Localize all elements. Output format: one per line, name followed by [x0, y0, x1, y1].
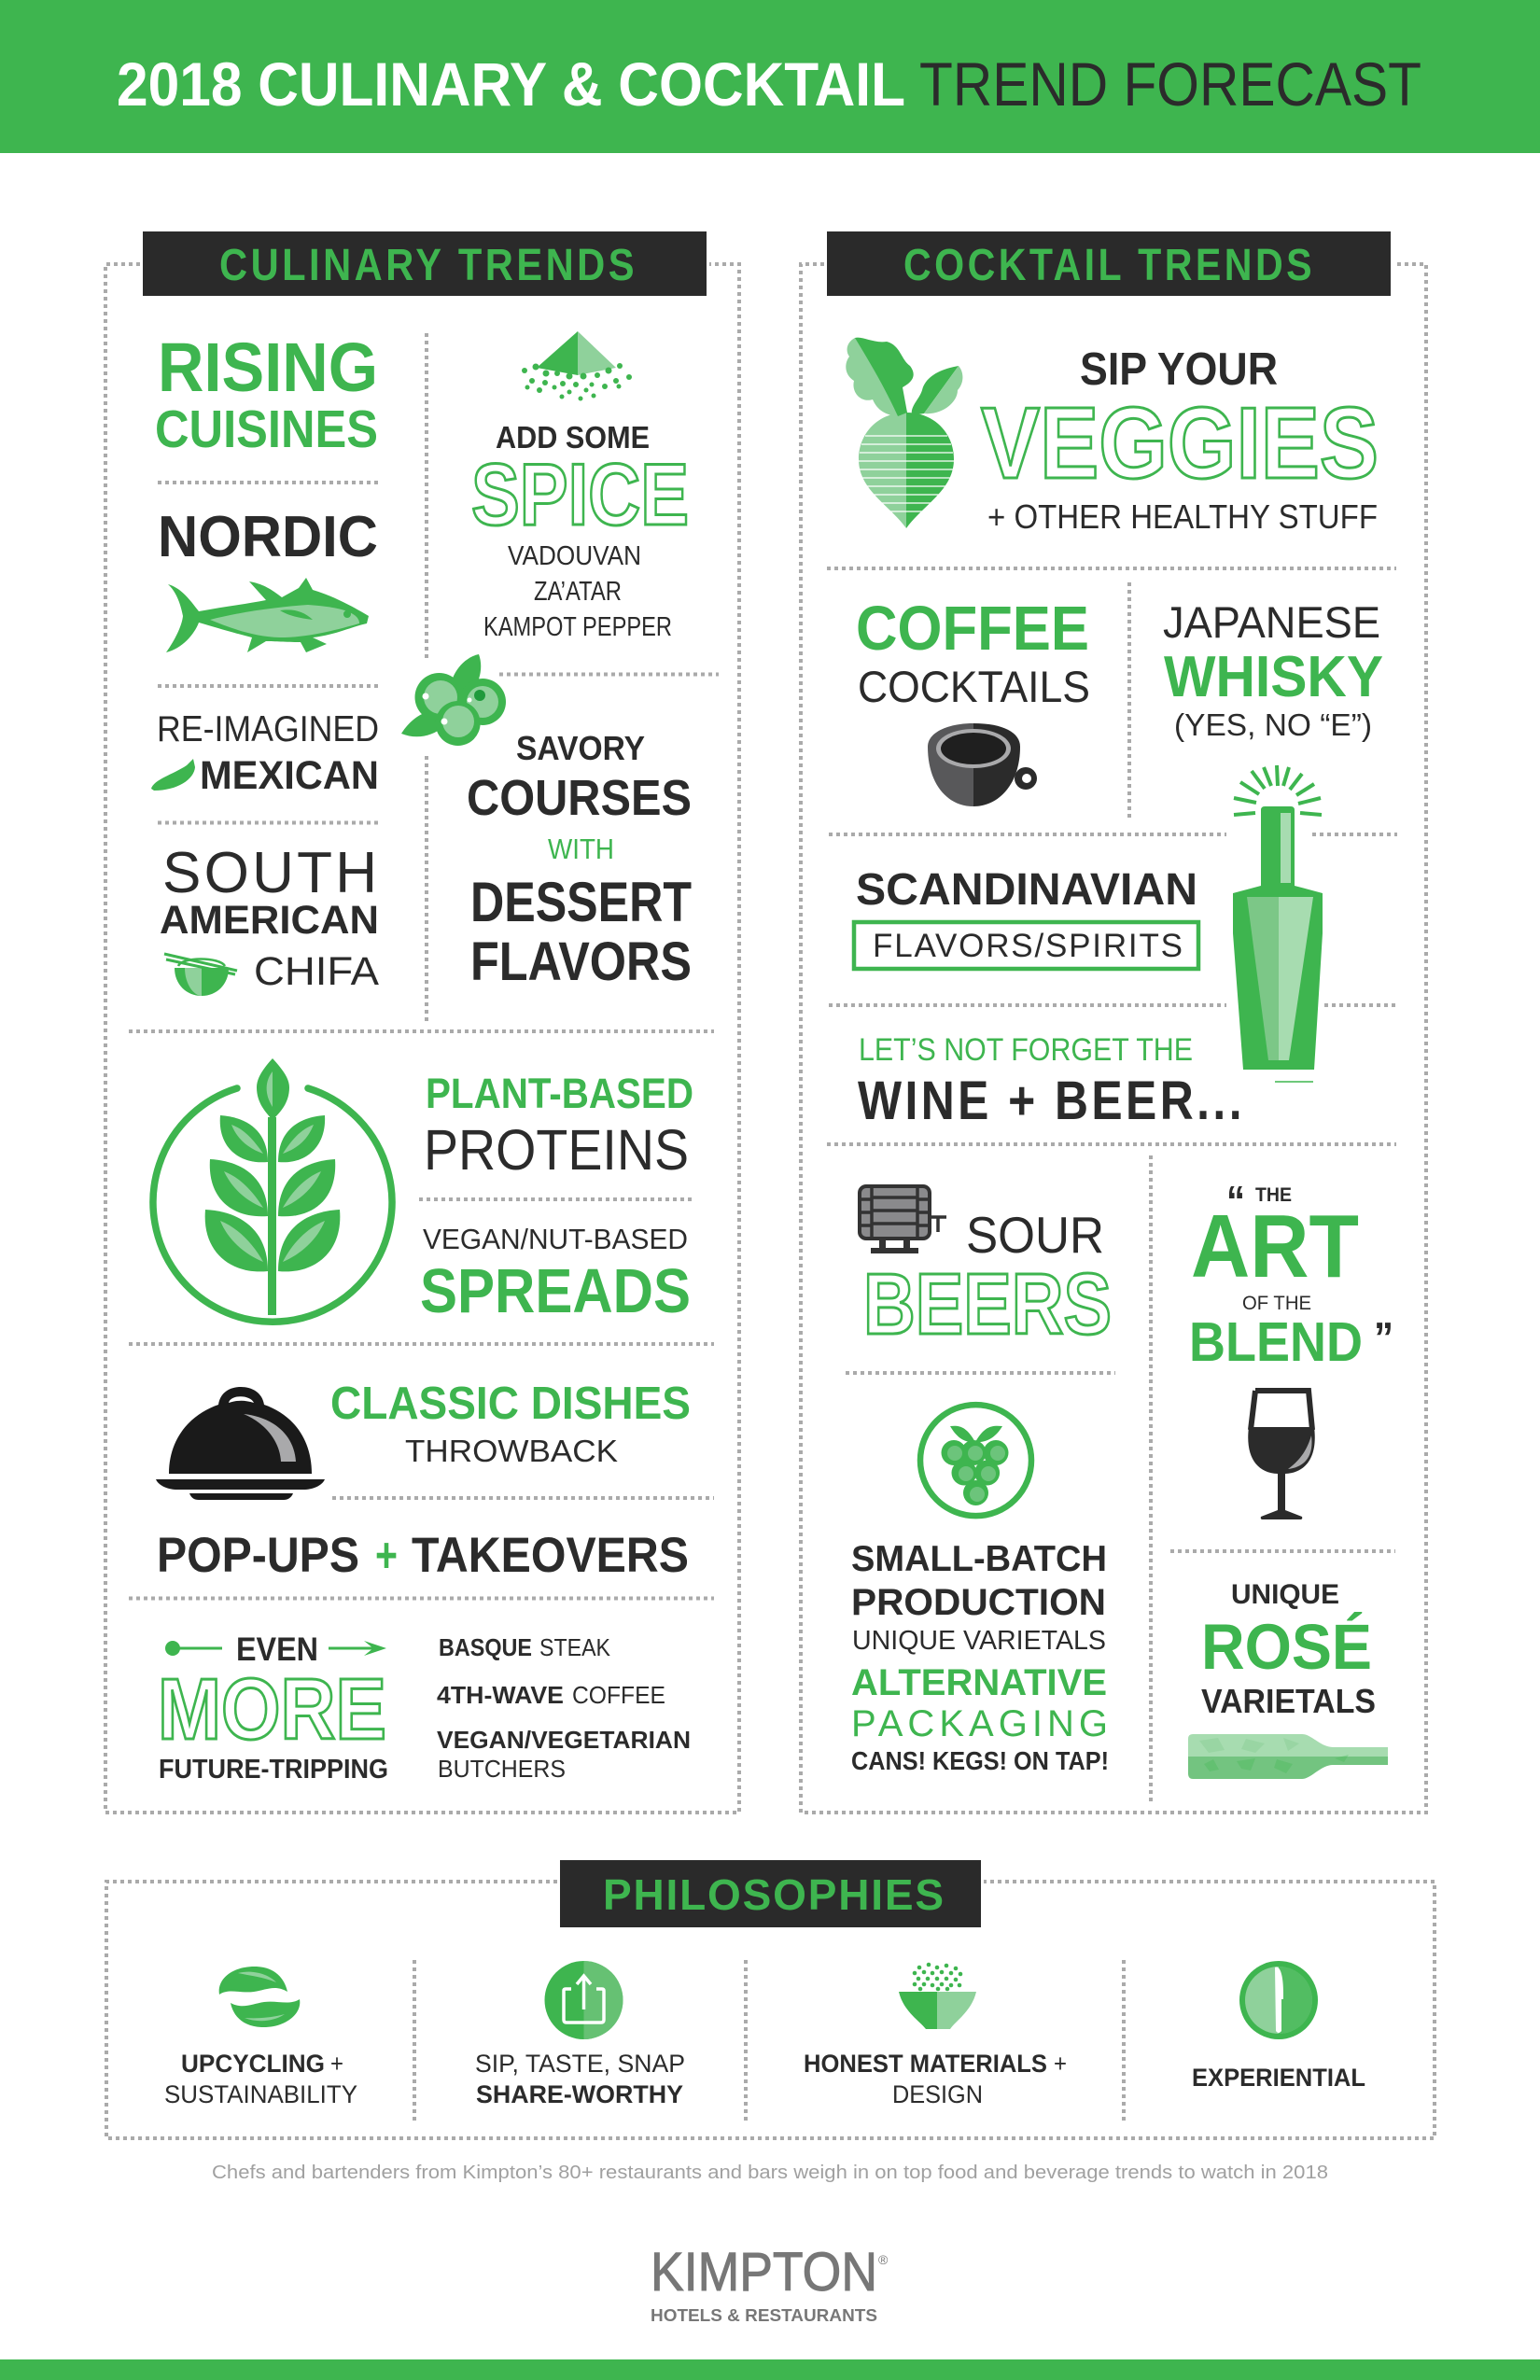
icon: grapes in circle — [920, 1405, 1031, 1516]
kimpton logo: ® — [878, 2252, 889, 2267]
small-batch production block: ALTERNATIVE — [851, 1662, 1107, 1703]
japanese whisky label — [1163, 597, 1383, 742]
icon: bowl and chopsticks — [164, 954, 237, 996]
icon: barrel with tap — [860, 1186, 946, 1253]
flavors spirits boxed label: FLAVORS/SPIRITS — [873, 928, 1183, 964]
honest materials label — [804, 2050, 1067, 2108]
plant-based proteins label: PLANT-BASED — [426, 1070, 693, 1117]
honest materials label: + — [1054, 2050, 1067, 2078]
unique rose varietals label: UNIQUE — [1231, 1579, 1339, 1610]
art of the blend quote: ” — [1374, 1313, 1393, 1362]
small-batch production block: PACKAGING — [851, 1703, 1108, 1744]
title bold part: 2018 CULINARY & COCKTAIL — [117, 49, 905, 119]
mexican label: MEXICAN — [200, 753, 379, 798]
future trends list: BASQUE — [439, 1633, 532, 1661]
upcycling label: UPCYCLING — [181, 2050, 325, 2078]
culinary heading — [143, 231, 707, 296]
icon: wine glass — [1248, 1391, 1315, 1519]
icon: recycling leaves — [219, 1967, 300, 2027]
spice list: VADOUVAN — [508, 541, 641, 571]
culinary heading: CULINARY TRENDS — [219, 241, 637, 290]
panel: culinary trends — [105, 231, 739, 1813]
pop-ups and takeovers label: TAKEOVERS — [412, 1528, 689, 1583]
kimpton logo: HOTELS & RESTAURANTS — [651, 2306, 877, 2325]
kimpton logo: KIMPTON — [651, 2242, 877, 2303]
sour beers label — [863, 1206, 1112, 1352]
rising cuisines heading: CUISINES — [155, 399, 378, 459]
plant-based proteins label — [424, 1070, 693, 1182]
vegan nut-based spreads label: SPREADS — [420, 1256, 691, 1326]
header banner — [0, 0, 1540, 153]
icon: rose bottle — [1188, 1734, 1388, 1779]
art of the blend quote: BLEND — [1189, 1311, 1363, 1373]
add some label: ADD SOME — [496, 420, 650, 455]
sip your veggies block — [981, 344, 1379, 536]
philosophies heading — [560, 1860, 981, 1927]
classic dishes label: THROWBACK — [405, 1434, 618, 1468]
wine and beer label: LET’S NOT FORGET THE — [859, 1032, 1193, 1068]
small-batch production block: PRODUCTION — [851, 1582, 1106, 1623]
share-worthy label: SHARE-WORTHY — [476, 2080, 683, 2108]
savory courses with dessert flavors block — [467, 729, 692, 992]
japanese whisky label: JAPANESE — [1163, 597, 1380, 647]
future trends list: VEGAN/VEGETARIAN — [437, 1726, 691, 1754]
sip your veggies block: + OTHER HEALTHY STUFF — [987, 497, 1378, 536]
cocktail heading — [827, 231, 1391, 296]
art of the blend quote: “ — [1226, 1177, 1245, 1225]
art of the blend quote: OF THE — [1242, 1293, 1311, 1314]
footer bar — [0, 2359, 1540, 2380]
icon: berries — [401, 654, 506, 746]
vegan nut-based spreads label: VEGAN/NUT-BASED — [423, 1223, 688, 1255]
classic dishes label — [330, 1379, 691, 1468]
spice list: KAMPOT PEPPER — [483, 612, 672, 642]
future trends list: STEAK — [539, 1633, 611, 1661]
rising cuisines heading — [155, 329, 378, 459]
rising cuisines heading: RISING — [158, 329, 378, 406]
honest materials label: HONEST MATERIALS — [804, 2050, 1047, 2078]
panel: philosophies — [106, 1860, 1435, 2138]
icon: beet — [846, 338, 962, 528]
small-batch production block: CANS! KEGS! ON TAP! — [851, 1746, 1109, 1775]
even more future-tripping block — [158, 1631, 388, 1785]
leaves — [205, 1115, 340, 1271]
icon: plant in circle — [153, 1058, 392, 1322]
savory courses with dessert flavors block: SAVORY — [516, 729, 645, 767]
icon: bowl with grains — [899, 1963, 976, 2029]
even more future-tripping block: FUTURE-TRIPPING — [159, 1755, 388, 1785]
coffee cocktails label: COCKTAILS — [858, 662, 1090, 711]
savory courses with dessert flavors block: FLAVORS — [470, 931, 692, 992]
even more future-tripping block: MORE — [158, 1660, 386, 1757]
future trends list: 4TH-WAVE — [437, 1681, 564, 1709]
upcycling label — [164, 2050, 357, 2108]
vegan nut-based spreads label — [420, 1223, 691, 1326]
experiential label: EXPERIENTIAL — [1192, 2064, 1365, 2092]
title regular part: TREND FORECAST — [919, 49, 1421, 119]
south label: SOUTH — [162, 841, 377, 905]
japanese whisky label: (YES, NO “E”) — [1174, 707, 1372, 742]
icon: serving cloche — [156, 1387, 325, 1500]
icon: knife in circle — [1239, 1961, 1318, 2039]
pop-ups and takeovers label — [157, 1528, 689, 1583]
spice list — [483, 541, 672, 642]
upcycling label: + — [330, 2050, 343, 2078]
sour beers label: BEERS — [863, 1255, 1112, 1352]
icon: coffee cup — [928, 723, 1037, 806]
even more future-tripping block: EVEN — [236, 1631, 318, 1668]
coffee cocktails label — [856, 594, 1090, 711]
unique rose varietals label — [1201, 1579, 1376, 1720]
caption: Chefs and bartenders from Kimpton’s 80+ restaurants and bars weigh in on top food and beverage trends to watch in 2018 — [212, 2163, 1328, 2183]
coffee cocktails label: COFFEE — [856, 594, 1089, 664]
icon: spice pile — [522, 331, 632, 401]
wine and beer label: WINE + BEER... — [858, 1071, 1245, 1131]
upcycling label: SUSTAINABILITY — [164, 2080, 357, 2108]
future trends list: COFFEE — [572, 1681, 665, 1709]
panel: cocktail trends — [801, 231, 1426, 1813]
future trends list: BUTCHERS — [438, 1755, 566, 1783]
share-worthy label — [475, 2050, 685, 2108]
small-batch production block — [851, 1539, 1109, 1775]
sip your veggies block: SIP YOUR — [1080, 344, 1278, 395]
small-batch production block: UNIQUE VARIETALS — [852, 1626, 1106, 1656]
unique rose varietals label: ROSÉ — [1201, 1611, 1372, 1683]
re-imagined label: RE-IMAGINED — [157, 709, 379, 749]
spice list: ZA’ATAR — [534, 577, 622, 607]
philosophies heading: PHILOSOPHIES — [603, 1870, 944, 1919]
plant-based proteins label: PROTEINS — [424, 1118, 689, 1182]
classic dishes label: CLASSIC DISHES — [330, 1379, 691, 1429]
sip your veggies block: VEGGIES — [981, 386, 1379, 500]
spice outlined word: SPICE — [471, 445, 689, 543]
honest materials label: DESIGN — [892, 2080, 983, 2108]
future trends list — [437, 1633, 691, 1783]
pop-ups and takeovers label: + — [375, 1528, 398, 1583]
art of the blend quote: THE — [1255, 1184, 1292, 1206]
japanese whisky label: WHISKY — [1164, 645, 1383, 709]
pop-ups and takeovers label: POP-UPS — [157, 1528, 359, 1583]
art of the blend quote: ART — [1191, 1197, 1359, 1296]
scandinavian label: SCANDINAVIAN — [856, 865, 1197, 915]
icon: fish — [166, 578, 369, 652]
small-batch production block: SMALL-BATCH — [851, 1539, 1107, 1579]
icon: chili pepper — [151, 759, 195, 791]
icon: share — [545, 1961, 623, 2039]
savory courses with dessert flavors block: DESSERT — [470, 871, 692, 933]
cocktail heading: COCKTAIL TRENDS — [903, 241, 1315, 290]
nordic label: NORDIC — [158, 505, 378, 569]
savory courses with dessert flavors block: WITH — [548, 833, 614, 865]
arrow — [329, 1641, 386, 1656]
icon: bottle with rays — [1233, 765, 1323, 1082]
share-worthy label: SIP, TASTE, SNAP — [475, 2050, 685, 2078]
art of the blend quote — [1189, 1177, 1393, 1373]
wine and beer label — [858, 1032, 1245, 1131]
savory courses with dessert flavors block: COURSES — [467, 770, 692, 826]
unique rose varietals label: VARIETALS — [1201, 1682, 1376, 1720]
chifa label: CHIFA — [254, 949, 379, 994]
american label: AMERICAN — [160, 898, 379, 943]
sour beers label: SOUR — [966, 1206, 1104, 1264]
